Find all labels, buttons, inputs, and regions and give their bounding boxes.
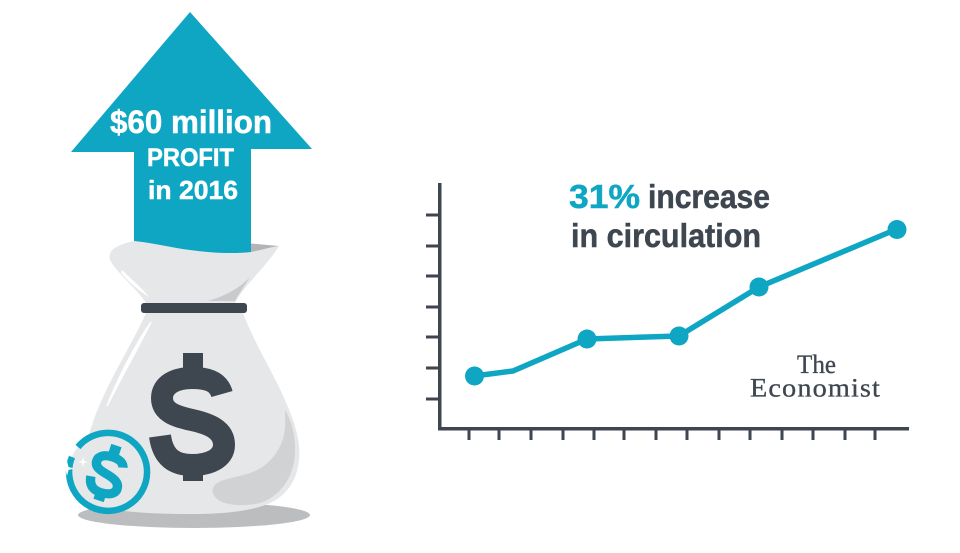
percent figure: 31% [569, 178, 640, 215]
logo: The Economist [750, 350, 881, 402]
icon: profit arrow [71, 12, 312, 256]
bag body [85, 313, 299, 514]
neck highlight [121, 270, 149, 297]
chart axes [426, 183, 909, 440]
bag tie [141, 303, 247, 313]
icon: money bag shadow [78, 502, 310, 528]
icon: large dollar sign [160, 353, 224, 481]
sparkle small [78, 457, 88, 467]
icon: money bag [85, 241, 299, 514]
data line [474, 229, 897, 376]
logo word: Economist: Economist [750, 374, 881, 402]
sparkle large [60, 461, 74, 476]
data points [465, 220, 906, 386]
icon: bag interior [245, 243, 279, 256]
coin ring [69, 433, 147, 511]
coin face [68, 434, 146, 512]
neck shading [208, 277, 250, 301]
line chart [426, 183, 909, 440]
arrow label [110, 104, 272, 205]
icon: dollar coin [60, 433, 147, 512]
heading line two: in circulation [571, 217, 761, 254]
profit amount: $60 million [110, 104, 272, 140]
body highlight [107, 322, 151, 406]
body shading [213, 410, 295, 505]
small dollar sign [84, 441, 130, 505]
profit word: PROFIT [147, 144, 234, 172]
logo word: The: The [797, 350, 836, 379]
profit year: in 2016 [148, 175, 238, 205]
chart heading [569, 178, 770, 254]
heading line one: increase [648, 178, 770, 215]
bag neck [110, 241, 279, 303]
